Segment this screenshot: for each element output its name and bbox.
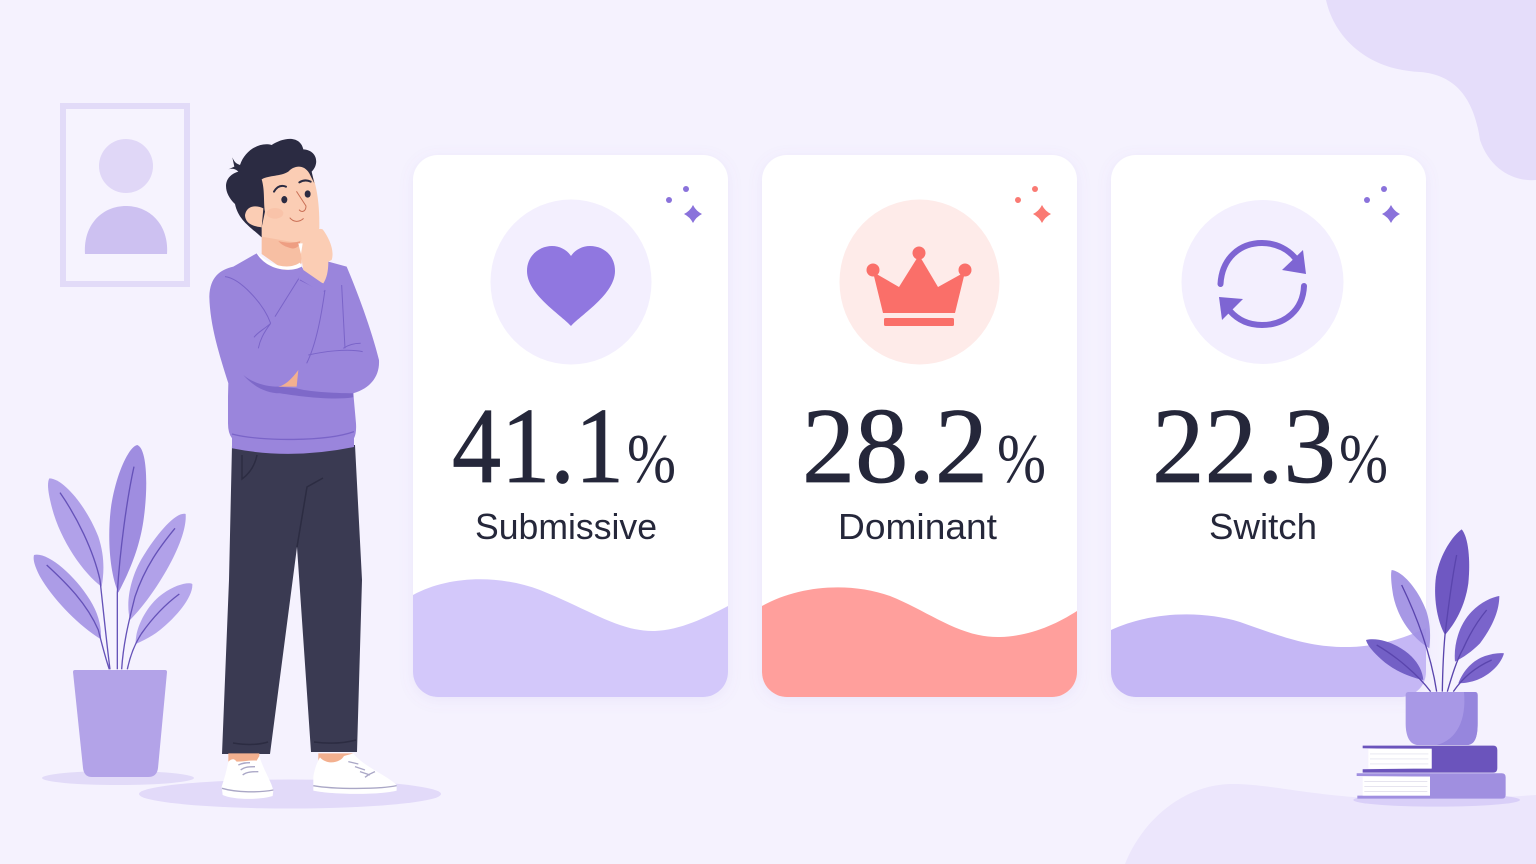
stat: 22.3%: 22.3: [1152, 387, 1336, 506]
panel: Submissive card: %: [627, 421, 676, 498]
card wave: [413, 579, 728, 697]
panel: Switch card: %: [1339, 421, 1388, 498]
hair: [226, 139, 316, 237]
trousers: [222, 445, 362, 754]
wall picture frame: [63, 106, 187, 284]
icon: cycle arrows: [1182, 200, 1344, 364]
sparkles: [666, 186, 702, 223]
left potted plant: [34, 445, 194, 785]
label: Submissive: [475, 506, 657, 547]
panel: Submissive card: [413, 155, 728, 697]
panel: Switch card: [1111, 155, 1426, 697]
card wave: [1111, 614, 1426, 697]
background blob: top right: [1326, 0, 1536, 180]
background blob: bottom right: [1125, 784, 1536, 864]
eyes and brows: [281, 196, 287, 203]
label: Dominant: [838, 506, 997, 547]
icon: crown: [840, 200, 1000, 364]
icon: heart: [490, 200, 652, 364]
stat: 41.1%: 41.1: [452, 387, 624, 506]
person: [139, 139, 441, 809]
floor shadow: [139, 780, 441, 808]
card wave: [762, 587, 1077, 697]
shoes: [222, 753, 397, 799]
panel: Dominant card: [762, 155, 1077, 697]
sparkles: [1015, 186, 1051, 223]
sweater and head: [209, 139, 379, 454]
hand and sleeve cuff: [300, 229, 333, 283]
stat: 28.2%: 28.2: [802, 387, 988, 506]
ear: [245, 206, 263, 227]
sparkles: [1364, 186, 1400, 223]
face: [262, 166, 319, 242]
label: Switch: [1209, 506, 1317, 547]
panel: Dominant card: %: [997, 421, 1046, 498]
right plant on books: [1353, 529, 1520, 807]
